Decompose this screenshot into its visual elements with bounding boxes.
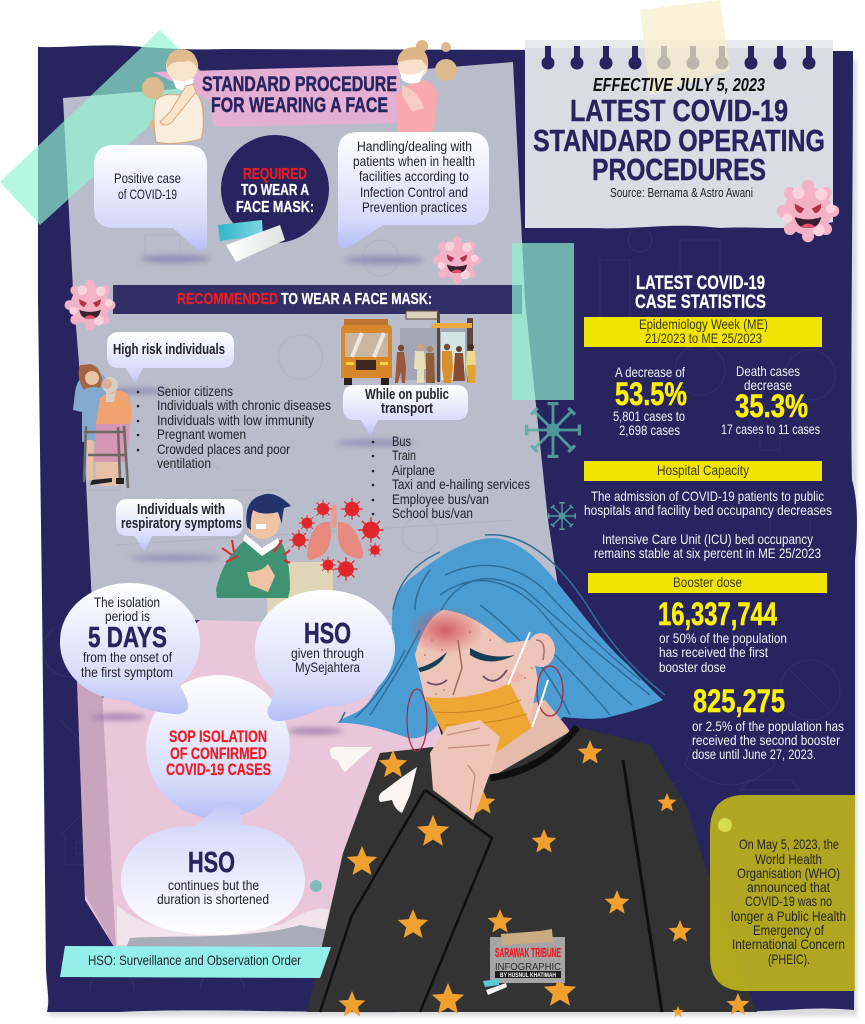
- stat: case decrease: 53.5%: [615, 376, 687, 412]
- list: high risk items: Pregnant women: [157, 426, 246, 442]
- illustration: jacket details: [320, 727, 662, 1012]
- bubble: high risk individuals: [100, 332, 234, 394]
- stat: case decrease: A decrease of: [615, 364, 685, 380]
- bubble shadows: [90, 714, 343, 734]
- illustration: masked boy coughing: [154, 49, 203, 143]
- stat: second booster: [692, 683, 844, 762]
- illustration: woman's jacket: [307, 727, 757, 1012]
- bubble: HSO continues but shortened: duration is shortened: [157, 891, 269, 907]
- illustration: woman's hair: [337, 535, 665, 760]
- strip: HSO definition: [60, 946, 331, 978]
- bubble: HSO given through MySejahtera: given through: [291, 645, 364, 661]
- bubble: HSO given through MySejahtera: MySejahtera: [295, 659, 360, 675]
- illustration: woman's face: [407, 606, 555, 740]
- title block: EFFECTIVE JULY 5, 2023: [593, 75, 765, 95]
- heading: case statistics: [635, 273, 766, 313]
- bubble: handling patients: patients when in health: [353, 153, 475, 169]
- logo: Sarawak Tribune infographic: INFOGRAPHIC: [495, 962, 561, 973]
- bubble: isolation period 5 days: 5 DAYS: [88, 622, 167, 654]
- text: hospital capacity details: Intensive Care Unit (ICU) bed occupancy: [602, 531, 813, 547]
- icon: pink virus mid: [433, 236, 481, 284]
- bubble: handling patients: [338, 132, 489, 264]
- bubble: positive case: Positive case: [114, 170, 181, 186]
- heading: case statistics: CASE STATISTICS: [635, 292, 766, 313]
- bubble: isolation period 5 days: the first symptom: [81, 664, 173, 680]
- banner: recommended to wear a face mask: RECOMMENDED: [177, 291, 278, 308]
- badge: required to wear a face mask: [218, 135, 329, 262]
- list: high risk items: Individuals with chronic diseases: [157, 397, 331, 413]
- callout: WHO announcement note: longer a Public Health: [731, 908, 846, 924]
- stat: first booster: [658, 596, 787, 675]
- callout: WHO announcement note: (PHEIC).: [768, 951, 810, 967]
- callout: WHO announcement note: [710, 795, 855, 991]
- bubble: HSO continues but shortened: continues but the: [168, 877, 259, 893]
- bubble: HSO continues but shortened: HSO: [188, 847, 235, 879]
- illustration: masked girl coughing: [396, 40, 438, 134]
- bubble: HSO given through MySejahtera: HSO: [304, 618, 351, 650]
- title block: Source: Bernama & Astro Awani: [610, 185, 753, 200]
- heading: standard procedure: [202, 73, 397, 117]
- bubble: isolation period 5 days: [60, 583, 200, 714]
- text: hospital capacity details: [584, 488, 832, 561]
- bubble: handling patients: facilities according to: [359, 168, 469, 184]
- stat: second booster: dose until June 27, 2023.: [692, 746, 816, 762]
- bar: hospital capacity: Hospital Capacity: [657, 462, 749, 478]
- icon: pink virus left: [65, 280, 115, 330]
- list: public transport items: Train: [392, 447, 416, 463]
- illustration: woman's neck: [470, 700, 575, 778]
- logo: Sarawak Tribune infographic: [483, 929, 565, 995]
- callout: WHO announcement note: Organisation (WHO): [737, 865, 840, 881]
- banner: recommended to wear a face mask: TO WEAR A FACE MASK:: [281, 291, 432, 308]
- bar: hospital capacity: [584, 461, 822, 481]
- panel: grey paper section: [63, 62, 560, 625]
- list: public transport items: School bus/van: [392, 505, 473, 521]
- bubble: handling patients: Infection Control and: [360, 184, 468, 200]
- list: public transport items: Airplane: [392, 462, 435, 478]
- illustration: small tan virus particles: [142, 42, 457, 128]
- stat: case decrease: 2,698 cases: [619, 422, 680, 438]
- illustration: paper bag behind man: [267, 562, 333, 625]
- list: high risk items: Crowded places and poor: [157, 441, 290, 457]
- tape: cream tape on notebook: [640, 0, 730, 95]
- list: high risk items: Senior citizens: [157, 383, 233, 399]
- callout: WHO announcement note: Emergency of: [753, 922, 824, 938]
- list: high risk items: [137, 383, 331, 471]
- banner: recommended to wear a face mask: [113, 285, 522, 314]
- stat: second booster: received the second booster: [692, 732, 840, 748]
- text: hospital capacity details: remains stable at six percent in ME 25/2023: [594, 545, 821, 561]
- callout: WHO announcement note: World Health: [755, 851, 822, 867]
- tape: diagonal mint tape: [0, 30, 205, 225]
- illustration: bus and bus stop: [341, 311, 476, 385]
- bubble: positive case: of COVID-19: [118, 186, 177, 202]
- icon: teal virus large: [527, 404, 579, 456]
- stat: first booster: booster dose: [659, 659, 726, 675]
- illustration: white tissue pieces: [330, 747, 417, 813]
- bubble: isolation period 5 days: period is: [105, 608, 150, 624]
- bar: epidemiology week: Epidemiology Week (ME): [639, 316, 768, 332]
- title block: LATEST COVID-19: [570, 93, 788, 128]
- heading: case statistics: LATEST COVID-19: [636, 273, 765, 294]
- illustration: earrings: [407, 666, 563, 751]
- bubble: SOP isolation of confirmed cases: COVID-19 CASES: [166, 760, 271, 779]
- illustration: woman's hand: [430, 720, 500, 820]
- stat: first booster: 16,337,744: [658, 596, 777, 632]
- hand finger lines: [447, 728, 490, 810]
- bubble: HSO continues but shortened: [121, 801, 305, 935]
- title block: PROCEDURES: [592, 152, 766, 187]
- bubble: SOP isolation of confirmed cases: [146, 675, 290, 819]
- stat: death decrease: [721, 363, 820, 437]
- bubble: isolation period 5 days: from the onset of: [83, 649, 172, 665]
- callout: WHO announcement note: COVID-19 was no: [745, 893, 832, 909]
- background pattern: medical outline icons: [43, 228, 840, 990]
- stat: death decrease: Death cases: [736, 363, 800, 379]
- stat: first booster: has received the first: [659, 644, 768, 660]
- bubble: while on public transport: While on public: [365, 386, 449, 403]
- list: high risk items: Individuals with low immunity: [157, 412, 314, 428]
- callout: WHO announcement note: On May 5, 2023, the: [739, 836, 839, 852]
- panel: pink paper section: [77, 615, 445, 950]
- stat: case decrease: [613, 364, 687, 438]
- tape: vertical mint tape: [512, 243, 574, 400]
- callout: WHO announcement note: announced that: [747, 879, 830, 895]
- logo: Sarawak Tribune infographic: BY HUSNUL KHATIMAH: [500, 973, 556, 979]
- callout: WHO announcement note: International Concern: [732, 936, 845, 952]
- bubble: isolation period 5 days: The isolation: [94, 594, 160, 610]
- bubble: handling patients: Prevention practices: [362, 199, 467, 215]
- list: public transport items: Employee bus/van: [392, 491, 489, 507]
- bubble: individuals with respiratory symptoms: Individuals with: [137, 501, 225, 518]
- logo: Sarawak Tribune infographic: SARAWAK TRIBUNE: [495, 945, 561, 960]
- bubble: HSO given through MySejahtera: [255, 590, 395, 721]
- stat: first booster: or 50% of the population: [659, 630, 787, 646]
- list: public transport items: Taxi and e-hailing services: [392, 476, 530, 492]
- heading: standard procedure: FOR WEARING A FACE: [211, 94, 388, 117]
- stat: death decrease: decrease: [744, 377, 792, 393]
- illustration: jacket stars: [339, 740, 749, 1017]
- badge: required to wear a face mask: FACE MASK:: [236, 199, 314, 216]
- bar: booster dose: Booster dose: [673, 574, 742, 590]
- bar: booster dose: [588, 573, 827, 593]
- bubble: individuals with respiratory symptoms: respiratory symptoms: [121, 515, 242, 532]
- illustration: orange face mask: [425, 632, 548, 752]
- list: high risk items: ventilation: [157, 455, 211, 471]
- list: public transport items: Bus: [392, 433, 411, 449]
- notebook holes: [542, 46, 816, 70]
- bubble: while on public transport: [335, 385, 468, 446]
- notebook: title card: [525, 40, 833, 228]
- bar: epidemiology week: [584, 316, 822, 347]
- bubble: high risk individuals: High risk individuals: [113, 341, 225, 358]
- strip: HSO definition: HSO: Surveillance and Observation Order: [88, 952, 301, 968]
- stat: case decrease: 5,801 cases to: [613, 408, 685, 424]
- bar: epidemiology week: 21/2023 to ME 25/2023: [645, 330, 762, 346]
- illustration: man with chest pain: [216, 494, 291, 598]
- list: public transport items: [372, 433, 530, 521]
- bubble: SOP isolation of confirmed cases: SOP ISOLATION: [169, 727, 267, 746]
- bubble: positive case: [94, 145, 210, 263]
- banner: standard procedure heading: [153, 65, 400, 127]
- heading: standard procedure: STANDARD PROCEDURE: [202, 73, 397, 96]
- stat: second booster: 825,275: [693, 683, 785, 719]
- badge: required to wear a face mask: TO WEAR A: [241, 182, 309, 199]
- icon: teal virus small: [549, 503, 575, 529]
- title block: [533, 75, 825, 200]
- bubble: handling patients: Handling/dealing with: [357, 138, 472, 154]
- illustration: lungs with red virus particles: [289, 498, 384, 581]
- background pattern: grey paper outlines: [90, 235, 515, 553]
- bubble: SOP isolation of confirmed cases: OF CONFIRMED: [170, 744, 267, 763]
- illustration: elderly woman and helper: [73, 364, 132, 488]
- badge: required to wear a face mask: REQUIRED: [243, 166, 307, 183]
- bubble: individuals with respiratory symptoms: [116, 499, 243, 561]
- icon: pink virus top right: [777, 180, 839, 242]
- stat: death decrease: 35.3%: [735, 388, 808, 424]
- stat: death decrease: 17 cases to 11 cases: [721, 421, 820, 437]
- bubble: while on public transport: transport: [381, 400, 433, 417]
